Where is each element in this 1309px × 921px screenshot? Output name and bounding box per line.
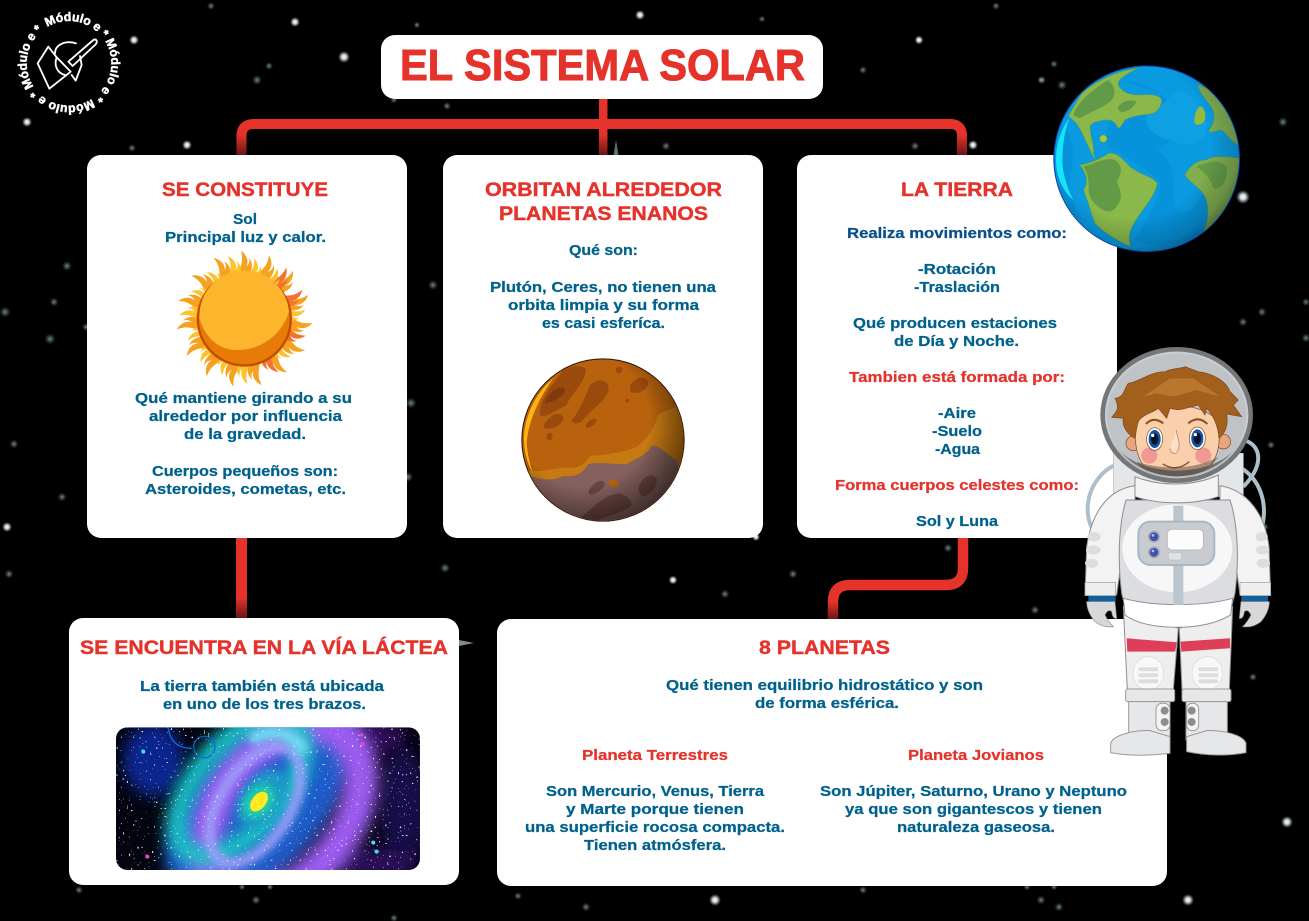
text: planeta jovianos: Planeta Jovianos	[908, 747, 1044, 764]
text: formada por: -Suelo	[932, 423, 982, 440]
boots	[1111, 689, 1246, 755]
legs	[1123, 607, 1233, 690]
torso	[1119, 500, 1237, 607]
text: planeta terrestres: y Marte porque tienen	[566, 801, 744, 818]
text: cuerpos celestes: Sol y Luna	[916, 513, 999, 530]
text: planeta terrestres	[525, 747, 785, 854]
text: movimientos: de Día y Noche.	[894, 333, 1019, 350]
logo icon: book and pencil	[38, 40, 97, 89]
connector lines	[236, 99, 968, 619]
text: mantiene girando: de la gravedad.	[184, 426, 306, 443]
panel: via lactea	[69, 618, 459, 885]
text: planeta terrestres: Planeta Terrestres	[582, 747, 728, 764]
panel: planetas enanos	[443, 155, 763, 538]
text: brazos: La tierra también está ubicada	[140, 678, 385, 695]
chest control panel	[1138, 522, 1214, 565]
head	[1126, 406, 1231, 480]
air hoses	[1088, 438, 1264, 532]
heading: via lactea: SE ENCUENTRA EN LA VÍA LÁCTEA	[80, 637, 448, 659]
torso highlight	[1122, 504, 1232, 592]
icon: earth globe	[1053, 65, 1242, 253]
waist	[1123, 598, 1233, 627]
panel: la tierra	[797, 155, 1117, 538]
text: equilibrio hidrostatico: Qué tienen equilibrio hidrostático y son	[666, 677, 983, 694]
icon: dwarf planet	[520, 357, 687, 523]
text: que son: Plutón, Ceres, no tienen una	[490, 279, 717, 296]
heading: planetas enanos	[485, 180, 722, 225]
text: cuerpos pequenos: Cuerpos pequeños son:	[152, 463, 338, 480]
text: que son: es casi esferíca.	[542, 315, 665, 332]
wrist bands	[1085, 582, 1271, 602]
hair	[1112, 367, 1242, 438]
text: que son: orbita limpia y su forma	[508, 297, 700, 314]
text: equilibrio hidrostatico: de forma esférica.	[755, 695, 899, 712]
text: movimientos	[847, 225, 1067, 350]
text: brazos: en uno de los tres brazos.	[163, 696, 366, 713]
collar	[1135, 475, 1218, 503]
gloves	[1087, 602, 1269, 627]
heading: planetas enanos: ORBITAN ALREDEDOR	[485, 180, 722, 201]
title: EL SISTEMA SOLAR	[400, 41, 805, 90]
text: movimientos: Qué producen estaciones	[853, 315, 1057, 332]
text: mantiene girando	[135, 390, 352, 443]
text: formada por: -Agua	[935, 441, 981, 458]
logo ring text: Módulo e * Módulo e * Módulo e * Módulo e *	[17, 12, 121, 115]
text: cuerpos celestes	[835, 477, 1079, 530]
text: formada por: Tambien está formada por:	[849, 369, 1065, 386]
heading: la tierra: LA TIERRA	[901, 180, 1013, 201]
arms	[1085, 486, 1271, 595]
image: galaxy	[116, 727, 420, 870]
icon: astronaut	[1085, 349, 1271, 755]
text: que son	[490, 242, 717, 332]
text: movimientos: Realiza movimientos como:	[847, 225, 1067, 242]
text: planeta jovianos: naturaleza gaseosa.	[897, 819, 1055, 836]
text: mantiene girando: Qué mantiene girando a su	[135, 390, 352, 407]
icon: sun	[176, 251, 313, 387]
text: brazos	[140, 678, 385, 713]
text: cuerpos celestes: Forma cuerpos celestes como:	[835, 477, 1079, 494]
text: planeta jovianos	[820, 747, 1127, 836]
text: formada por: -Aire	[938, 405, 976, 422]
text: sol: Principal luz y calor.	[165, 229, 326, 246]
logo: modulo e	[17, 12, 121, 115]
text: cuerpos pequenos	[145, 463, 346, 498]
backpack	[1113, 453, 1243, 497]
text: planeta jovianos: ya que son gigantescos y tienen	[845, 801, 1102, 818]
text: cuerpos pequenos: Asteroides, cometas, etc.	[145, 481, 346, 498]
heading: 8 planetas: 8 PLANETAS	[759, 638, 890, 659]
text: movimientos: -Traslación	[914, 279, 1000, 296]
heading: se constituye: SE CONSTITUYE	[162, 180, 328, 201]
text: movimientos: -Rotación	[918, 261, 996, 278]
text: planeta jovianos: Son Júpiter, Saturno, Urano y Neptuno	[820, 783, 1127, 800]
text: planeta terrestres: Tienen atmósfera.	[584, 837, 726, 854]
text: formada por	[849, 369, 1065, 458]
text: planeta terrestres: Son Mercurio, Venus, Tierra	[546, 783, 765, 800]
panel: se constituye	[87, 155, 407, 538]
text: equilibrio hidrostatico	[666, 677, 983, 712]
text: sol: Sol	[233, 211, 257, 228]
front stripe	[1173, 506, 1183, 605]
text: mantiene girando: alrededor por influencia	[149, 408, 343, 425]
helmet glass back	[1103, 349, 1251, 481]
text: que son: Qué son:	[569, 242, 638, 259]
text: sol	[165, 211, 326, 246]
helmet rim	[1103, 349, 1251, 481]
text: planeta terrestres: una superficie rocosa compacta.	[525, 819, 785, 836]
heading: planetas enanos: PLANETAS ENANOS	[499, 204, 708, 225]
panel: 8 planetas	[497, 619, 1167, 886]
